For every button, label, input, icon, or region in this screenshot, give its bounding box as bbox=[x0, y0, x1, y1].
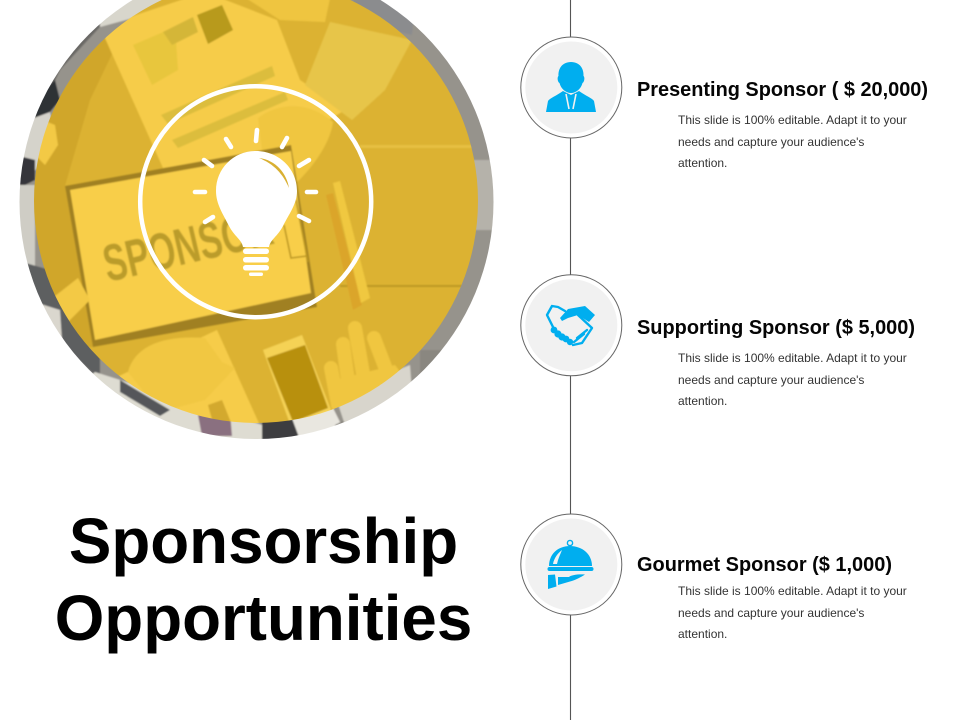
icon: light bulb bbox=[195, 130, 316, 276]
title: Opportunities bbox=[55, 583, 472, 654]
description 1: needs and capture your audience's bbox=[678, 135, 864, 149]
heading 3: Gourmet Sponsor ($ 1,000) bbox=[637, 554, 892, 576]
timeline line bbox=[570, 0, 572, 720]
tablet frame bbox=[65, 145, 317, 347]
top paper bbox=[100, 0, 345, 168]
photo circle with yellow overlay bbox=[0, 0, 500, 450]
arm, shirt and hand bbox=[249, 0, 330, 22]
description 2: needs and capture your audience's bbox=[678, 373, 864, 387]
pencils bbox=[326, 193, 362, 310]
icon: handshake bbox=[547, 306, 595, 345]
left hands bbox=[55, 278, 89, 321]
description 1: This slide is 100% editable. Adapt it to your bbox=[678, 113, 907, 127]
yellow overlay circle bbox=[30, 0, 482, 432]
sponsor text on paper: SPONSOR bbox=[98, 198, 278, 294]
description 2 bbox=[678, 351, 907, 408]
white ring bbox=[140, 86, 371, 317]
item 3: gourmet sponsor bbox=[521, 514, 907, 641]
title: Sponsorship bbox=[69, 506, 458, 577]
heading 2: Supporting Sponsor ($ 5,000) bbox=[637, 317, 915, 339]
title bbox=[55, 506, 472, 654]
icon: businessman bbox=[546, 62, 596, 112]
right hand bbox=[331, 328, 392, 405]
item 1: presenting sponsor bbox=[521, 37, 928, 170]
icon circle 2 bbox=[521, 275, 622, 376]
tablet paper bbox=[70, 151, 311, 340]
description 3: needs and capture your audience's bbox=[678, 606, 864, 620]
icon circle 3 bbox=[521, 514, 622, 615]
description 1 bbox=[678, 113, 907, 170]
icon circle 1 bbox=[521, 37, 622, 138]
heading 1: Presenting Sponsor ( $ 20,000) bbox=[637, 79, 928, 101]
item 2: supporting sponsor bbox=[521, 275, 915, 408]
description 1: attention. bbox=[678, 156, 727, 170]
description 2: This slide is 100% editable. Adapt it to your bbox=[678, 351, 907, 365]
description 2: attention. bbox=[678, 394, 727, 408]
description 3: This slide is 100% editable. Adapt it to your bbox=[678, 584, 907, 598]
description 3 bbox=[678, 584, 907, 641]
description 3: attention. bbox=[678, 627, 727, 641]
phone bbox=[262, 334, 332, 420]
clip and pen bbox=[284, 200, 308, 262]
icon: serving cloche on hand bbox=[548, 540, 594, 589]
bottom paper and hand bbox=[120, 330, 259, 423]
